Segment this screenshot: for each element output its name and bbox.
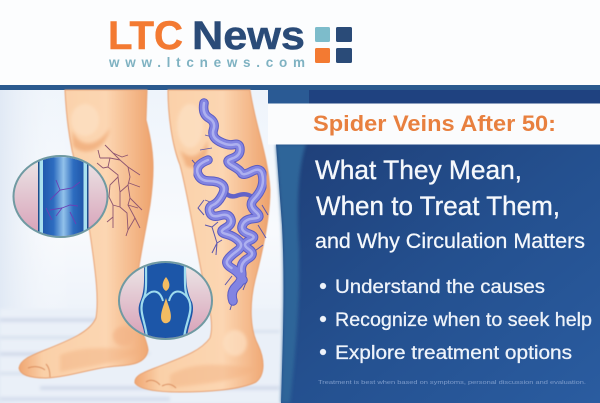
title line 3: and Why Circulation Matters — [315, 229, 585, 253]
toes — [28, 364, 50, 377]
header background — [0, 0, 600, 86]
right leg — [135, 90, 270, 392]
header divider bar — [0, 85, 600, 90]
foot shading — [170, 365, 258, 388]
floor — [0, 309, 285, 403]
right leg small veins — [192, 135, 268, 310]
logo wordmark LTC: LTC — [108, 14, 183, 58]
bullet 3: Explore treatment options — [335, 342, 572, 364]
inset vein with valves — [139, 260, 193, 340]
right blue panel — [268, 90, 600, 403]
vein body — [197, 103, 263, 301]
panel top block — [268, 90, 600, 104]
bullet 2: Recognize when to seek help — [335, 309, 592, 331]
logo squares — [315, 27, 352, 63]
valve yellow top — [163, 277, 169, 291]
inset: vein valve close-up — [119, 260, 212, 340]
title white band — [268, 104, 600, 144]
knee — [71, 104, 99, 136]
ankle — [113, 326, 135, 346]
leg shape — [135, 90, 270, 392]
footnote: Treatment is best when based on symptoms, personal discussion and evaluation. — [318, 380, 587, 386]
logo wordmark News: News — [192, 14, 305, 58]
panel top dark block — [309, 90, 600, 104]
knee shadow — [72, 128, 110, 152]
bullet 1: Understand the causes — [335, 276, 545, 298]
panel body — [276, 144, 600, 403]
toes — [146, 380, 176, 388]
knee — [177, 104, 203, 148]
ankle — [223, 330, 247, 356]
leg shape — [19, 90, 153, 378]
vein highlight — [197, 103, 263, 272]
right leg varicose veins — [197, 103, 263, 301]
left leg spider veins — [97, 145, 142, 236]
title orange: Spider Veins After 50: — [313, 111, 556, 136]
left leg — [19, 90, 153, 378]
logo url: www.ltcnews.com — [108, 55, 305, 70]
foot shading — [60, 348, 140, 372]
inset vein — [38, 157, 88, 236]
valve yellow bottom — [161, 298, 171, 323]
logo — [108, 14, 352, 70]
inset frame — [119, 262, 212, 339]
title line 2: When to Treat Them, — [316, 191, 560, 221]
panel light edge — [276, 144, 306, 403]
inset frame — [14, 156, 108, 237]
title line 1: What They Mean, — [315, 155, 522, 185]
inset: spider vein close-up — [12, 155, 108, 238]
bullet list — [320, 276, 592, 364]
connecting vein branch — [224, 190, 252, 197]
knee shadow — [180, 140, 208, 168]
vein shadow — [197, 103, 263, 301]
illustration background — [0, 90, 290, 403]
